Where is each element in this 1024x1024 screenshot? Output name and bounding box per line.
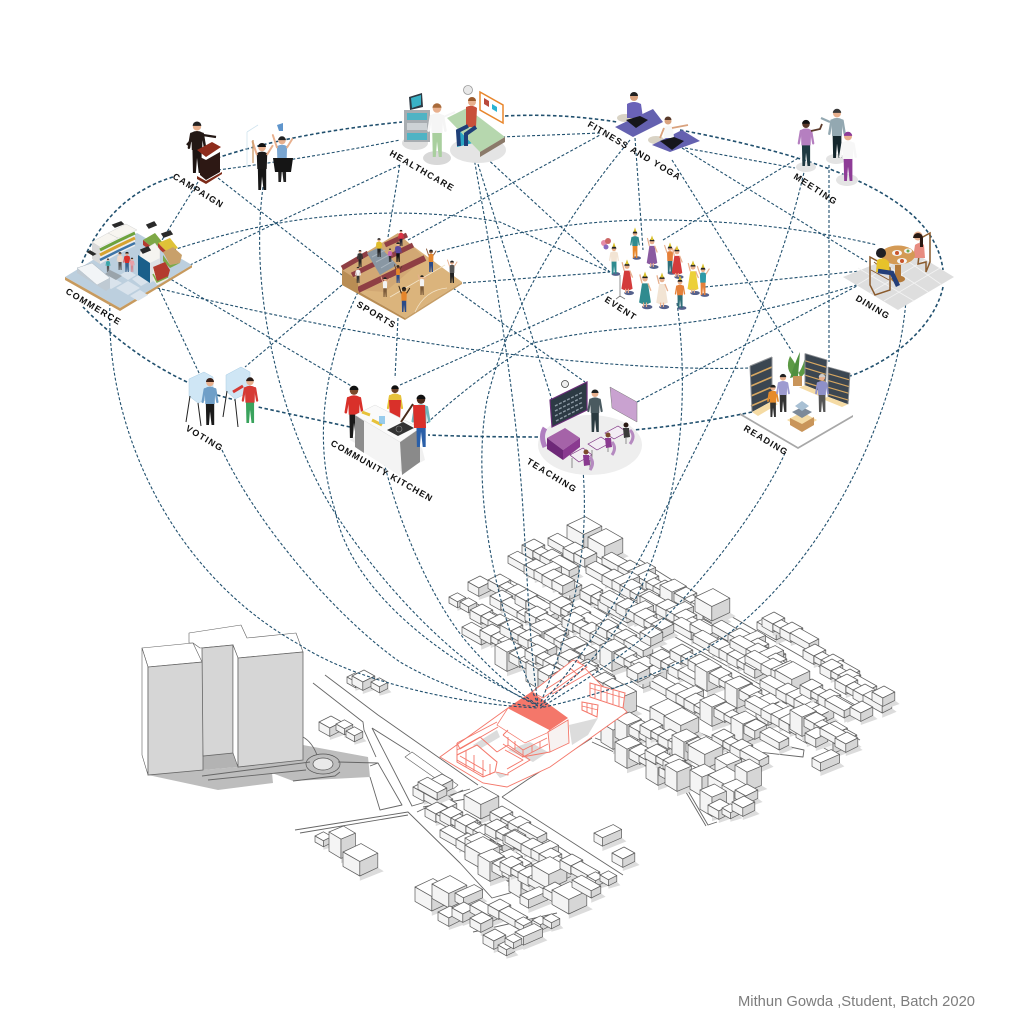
vignette: community kitchen bbox=[346, 385, 429, 476]
vignette: voting booths bbox=[186, 367, 257, 427]
credit: Mithun Gowda ,Student, Batch 2020 bbox=[738, 993, 975, 1010]
labels: activity names: VOTING bbox=[184, 423, 224, 453]
labels: activity names: EVENT bbox=[603, 294, 638, 322]
network: dashed links between activities bbox=[155, 133, 877, 423]
labels: activity names: SPORTS bbox=[355, 299, 397, 330]
labels: activity names: FITNESS AND YOGA bbox=[586, 119, 683, 182]
labels: activity names: TEACHING bbox=[525, 456, 578, 494]
map: south neighbourhood buildings bbox=[315, 670, 640, 959]
labels: activity names: CAMPAIGN bbox=[171, 171, 225, 209]
map: project site in red bbox=[440, 660, 627, 787]
vignette: campaign bbox=[187, 121, 293, 190]
labels: activity names: READING bbox=[742, 423, 789, 457]
vignette: event party guests bbox=[601, 227, 709, 310]
map: street network bbox=[295, 560, 860, 932]
vignette: healthcare bbox=[402, 86, 506, 165]
labels: activity names: MEETING bbox=[792, 171, 838, 206]
map: tower block with shadow and roundabout bbox=[142, 625, 378, 790]
labels: activity names: COMMUNITY KITCHEN bbox=[329, 438, 434, 503]
labels: activity names: COMMERCE bbox=[64, 286, 122, 327]
vignette: fitness and yoga bbox=[615, 92, 700, 152]
labels: activity names bbox=[64, 119, 891, 503]
map: north-east neighbourhood buildings bbox=[449, 517, 900, 823]
network: dashed outer ring bbox=[82, 115, 943, 437]
vignette: sports bbox=[342, 230, 462, 320]
labels: activity names: HEALTHCARE bbox=[388, 148, 455, 193]
vignette: meeting bbox=[796, 109, 858, 186]
labels: activity names: DINING bbox=[854, 293, 891, 321]
vignette: commerce bbox=[65, 222, 192, 311]
vignette: dining bbox=[843, 232, 954, 310]
vignette: reading library bbox=[740, 352, 853, 449]
vignette: teaching classroom bbox=[538, 380, 642, 475]
network: dashed arcs converging on the site bbox=[110, 140, 907, 708]
